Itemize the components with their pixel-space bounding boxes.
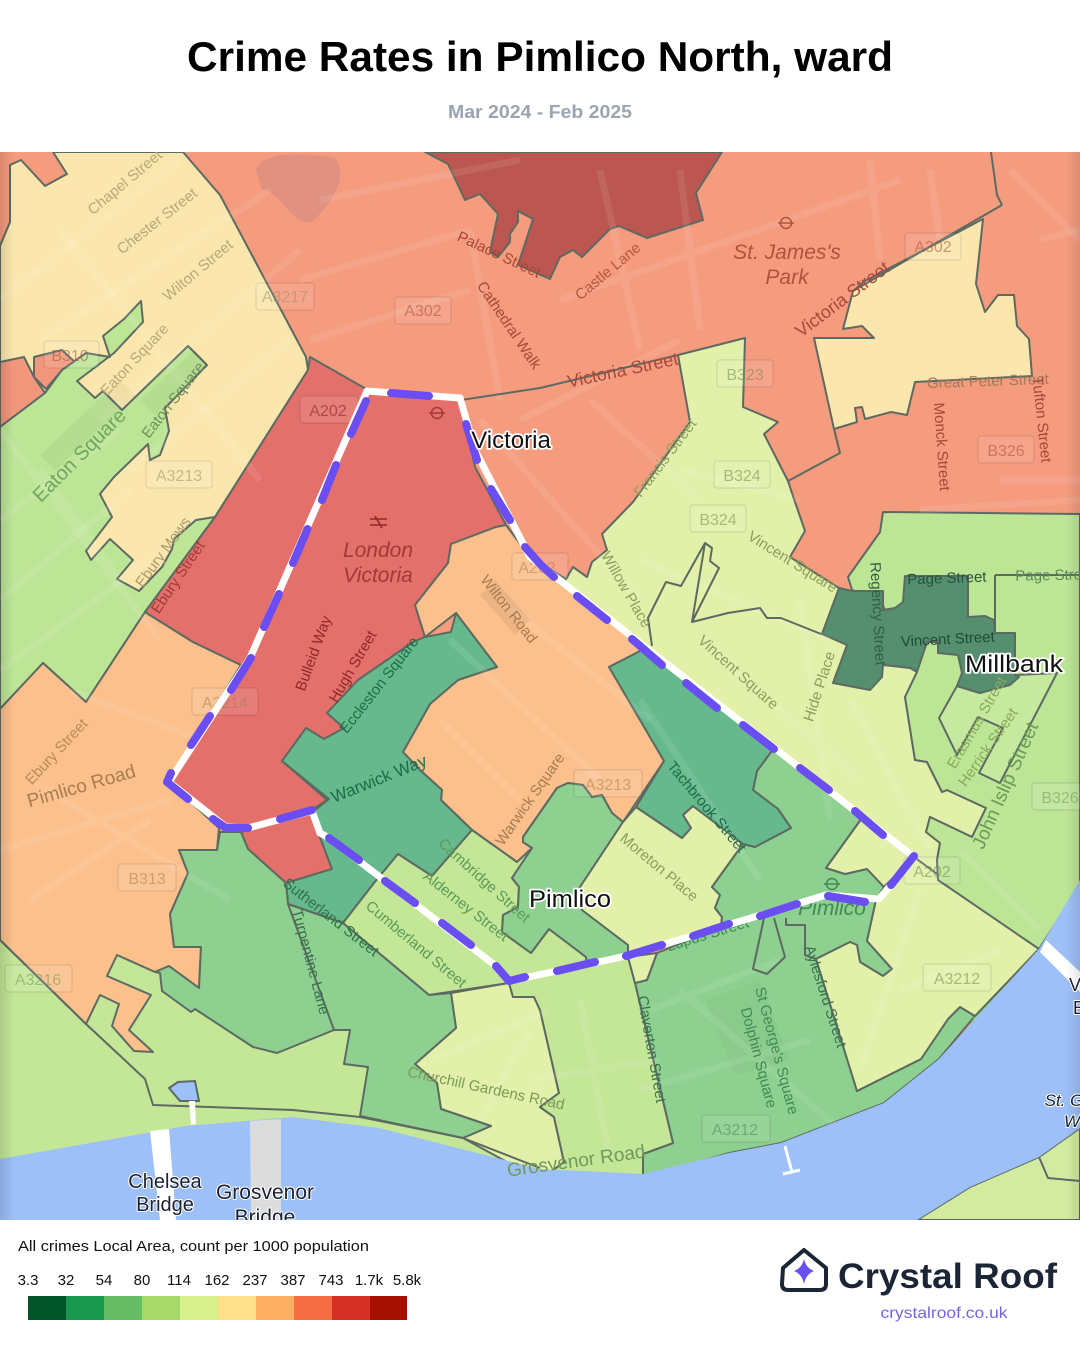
street labels: Erasmus Street	[944, 673, 1011, 772]
road shields: B323	[726, 367, 764, 384]
place label: Chelsea Bridge	[128, 1171, 203, 1216]
zone: south-west light green underlay	[0, 942, 498, 1159]
river Thames	[0, 880, 1080, 1220]
road shields: A3213	[156, 468, 202, 485]
road shields: A3214	[202, 695, 248, 712]
street labels: Monck Street	[930, 402, 953, 492]
legend tick values	[18, 1272, 422, 1289]
street labels: Alderney Street	[420, 868, 512, 945]
place label: Grosvenor Bridge	[216, 1181, 314, 1229]
street labels: Sutherland Street	[280, 875, 383, 961]
street labels: Dolphin Square	[737, 1006, 780, 1110]
street labels: Great Peter Street	[927, 371, 1050, 392]
road shields	[5, 233, 1080, 1142]
road shields: A202	[518, 560, 556, 577]
road shields: B313	[128, 871, 166, 888]
street labels: Herrick Street	[955, 704, 1022, 790]
zone: Warwick Way green	[282, 613, 497, 923]
icon: rail symbol	[370, 516, 387, 528]
zone: river bank green strip	[968, 974, 1016, 1026]
legend tick values: 162	[204, 1272, 230, 1289]
street labels: Cathedral Walk	[473, 278, 545, 373]
place label: St James's Park: St. James's	[733, 241, 841, 264]
legend tick values: 3.3	[18, 1272, 38, 1289]
street labels: Moreton Place	[616, 830, 701, 905]
place label: Grosvenor Bridge: Bridge	[235, 1206, 295, 1229]
zone: Grosvenor Road light green	[509, 957, 673, 1180]
street labels: Castle Lane	[572, 239, 644, 304]
street labels: Victoria Street	[566, 349, 680, 392]
street labels: Chester Street	[114, 184, 201, 258]
place label: cut-off St George Wharf	[1045, 1091, 1080, 1131]
place label: London Victoria: Victoria	[343, 564, 413, 587]
road shields: A3217	[262, 289, 308, 306]
zone: top dark red	[425, 152, 722, 279]
legend tick values: 32	[58, 1272, 74, 1289]
street labels: Pimlico Road	[25, 761, 138, 812]
icon: underground roundel Victoria	[429, 408, 445, 418]
zone: Eaton Square light green	[0, 301, 215, 709]
zone: east pale lime triangle	[826, 818, 914, 887]
street labels	[22, 146, 1080, 1182]
legend title: All crimes Local Area, count per 1000 population	[18, 1238, 369, 1255]
legend tick values: 743	[318, 1272, 344, 1289]
zone: inner Millbank estate	[939, 673, 1057, 783]
bridges	[150, 940, 1080, 1220]
road shields: A3216	[15, 972, 61, 989]
legend	[18, 1238, 422, 1320]
zone: Victoria station red	[145, 357, 506, 828]
zone: large pale lime north-east	[530, 338, 986, 880]
place label: St James's Park	[733, 241, 841, 289]
street labels: Eccleston Square	[337, 634, 422, 737]
legend tick values: 114	[167, 1272, 191, 1289]
street labels: Victoria Street	[791, 257, 893, 341]
street labels: Tachbrook Street	[663, 758, 750, 857]
road shields: A302	[404, 303, 442, 320]
street labels: Regency Street	[866, 562, 889, 667]
street labels: Eaton Square	[139, 359, 208, 442]
place label: Grosvenor Bridge: Grosvenor	[216, 1181, 314, 1204]
legend tick values: 237	[242, 1272, 268, 1289]
streets: faint road network	[0, 160, 1080, 1160]
internal boundaries	[0, 152, 1080, 1181]
zone: south-east land across river	[917, 1128, 1080, 1220]
place label: Chelsea Bridge: Bridge	[136, 1194, 194, 1216]
place label: London Victoria	[344, 542, 412, 582]
street labels: Francis Street	[631, 415, 701, 501]
street labels: Warwick Square	[492, 750, 568, 849]
road shields: A202	[309, 403, 347, 420]
street labels: Ebury Street	[148, 537, 209, 617]
zone: Regency Street dark green	[822, 576, 1019, 693]
icon: underground roundel Pimlico	[824, 878, 840, 890]
street labels: Grosvenor Road	[506, 1141, 647, 1182]
street labels: Claverton Street	[634, 994, 669, 1105]
street labels: Lupus Street	[665, 914, 752, 955]
road shields: A202	[913, 864, 951, 881]
street labels: Aylesford Street	[801, 943, 850, 1051]
street labels: Wilton Road	[477, 572, 540, 647]
place label: Pimlico station: Pimlico	[798, 897, 866, 920]
street labels: Hugh Street	[326, 627, 381, 706]
zone: small red block	[241, 814, 332, 883]
title: Crime Rates in Pimlico North, ward	[187, 33, 893, 80]
street labels: Wilton Street	[160, 236, 237, 305]
place label: cut-off St George Wharf: W	[1064, 1112, 1080, 1131]
street labels: Cambridge Street	[435, 835, 534, 927]
zone: central Pimlico medium green	[502, 783, 628, 965]
website link: crystalroof.co.uk	[880, 1305, 1009, 1322]
street labels: Ebury Street	[22, 715, 92, 788]
street labels: Bulleid Way	[292, 613, 335, 693]
legend tick values: 80	[134, 1272, 150, 1289]
zone: Lupus Street lime sliver	[628, 953, 657, 983]
place label: London Victoria: London	[343, 539, 413, 562]
road shields: B324	[699, 512, 737, 529]
road shields: A3212	[934, 971, 980, 988]
legend tick values: 1.7k	[355, 1272, 384, 1289]
street labels: Churchill Gardens Road	[406, 1064, 566, 1114]
street labels: Hide Place	[800, 649, 839, 724]
edge vignette	[0, 152, 10, 1220]
legend tick values: 387	[280, 1272, 306, 1289]
zone: west salmon patches	[0, 350, 76, 427]
zone: Moreton Place pale lime	[580, 806, 743, 957]
zone: west yellow area	[0, 152, 308, 590]
zone: Cambridge Street light green strip	[343, 830, 587, 995]
street labels: St George's Square	[751, 985, 802, 1116]
street labels: Palace Street	[454, 228, 544, 282]
place label: Victoria: Victoria	[471, 427, 551, 454]
park blocks	[40, 350, 530, 634]
place label: Pimlico: Pimlico	[529, 886, 611, 913]
road shields: A302	[914, 239, 952, 256]
logo: Crystal Roof	[782, 1250, 1057, 1322]
street labels: Vincent Square	[694, 632, 782, 713]
icon: underground roundel St James's	[778, 218, 794, 228]
icon: house with star	[782, 1250, 826, 1290]
zone: west orange	[0, 612, 241, 1052]
street labels: Cumberland Street	[362, 898, 470, 992]
zone: Tachbrook Street green	[609, 643, 791, 847]
legend tick values: 54	[96, 1272, 112, 1289]
zone: central orange	[403, 525, 664, 862]
road shields: B326	[987, 443, 1025, 460]
road shields: A3212	[712, 1122, 758, 1139]
legend tick values: 5.8k	[393, 1272, 422, 1289]
street labels: Tufton Street	[1029, 376, 1055, 464]
subtitle: date range: Mar 2024 - Feb 2025	[448, 102, 632, 122]
place label: Chelsea Bridge: Chelsea	[128, 1171, 203, 1193]
street labels: Vincent Square	[744, 528, 840, 597]
street labels: Willow Place	[597, 549, 655, 631]
street labels: Warwick Way	[328, 751, 430, 807]
road shields: B310	[51, 348, 89, 365]
street labels: Page Street	[907, 569, 988, 588]
street labels: Eaton Square	[29, 405, 131, 507]
place label: St James's Park: Park	[765, 266, 810, 289]
street labels: Ebury Mews	[132, 514, 194, 591]
place label: Millbank: Millbank	[965, 651, 1064, 678]
zone: south-east pale lime	[816, 857, 1039, 1091]
ward boundary: white line with dashed purple overlay	[167, 391, 914, 981]
street labels: Turpentine Lane	[288, 907, 333, 1017]
park: St James's lake	[256, 154, 340, 222]
place label: cut-off Vauxhall Bridge	[1069, 975, 1080, 1018]
road shields: B326	[1041, 790, 1079, 807]
road shields: B324	[723, 468, 761, 485]
street labels: Vincent Street	[900, 629, 996, 650]
zone: Vauxhall Bridge Road medium green	[635, 748, 975, 1178]
street labels: Eaton Square	[97, 321, 172, 399]
logo wordmark: Crystal Roof	[838, 1257, 1057, 1296]
pond	[169, 1081, 199, 1101]
zone: north-east yellow	[814, 219, 1032, 429]
zone: east light green Millbank	[848, 512, 1080, 949]
road shields: A3213	[585, 777, 631, 794]
street labels: John Islip Street	[969, 719, 1044, 852]
zone: Churchill Gardens pale lime	[415, 983, 564, 1180]
zone: railway lands medium green	[155, 832, 491, 1138]
legend colour scale	[28, 1296, 407, 1320]
street labels: Chapel Street	[85, 146, 166, 219]
